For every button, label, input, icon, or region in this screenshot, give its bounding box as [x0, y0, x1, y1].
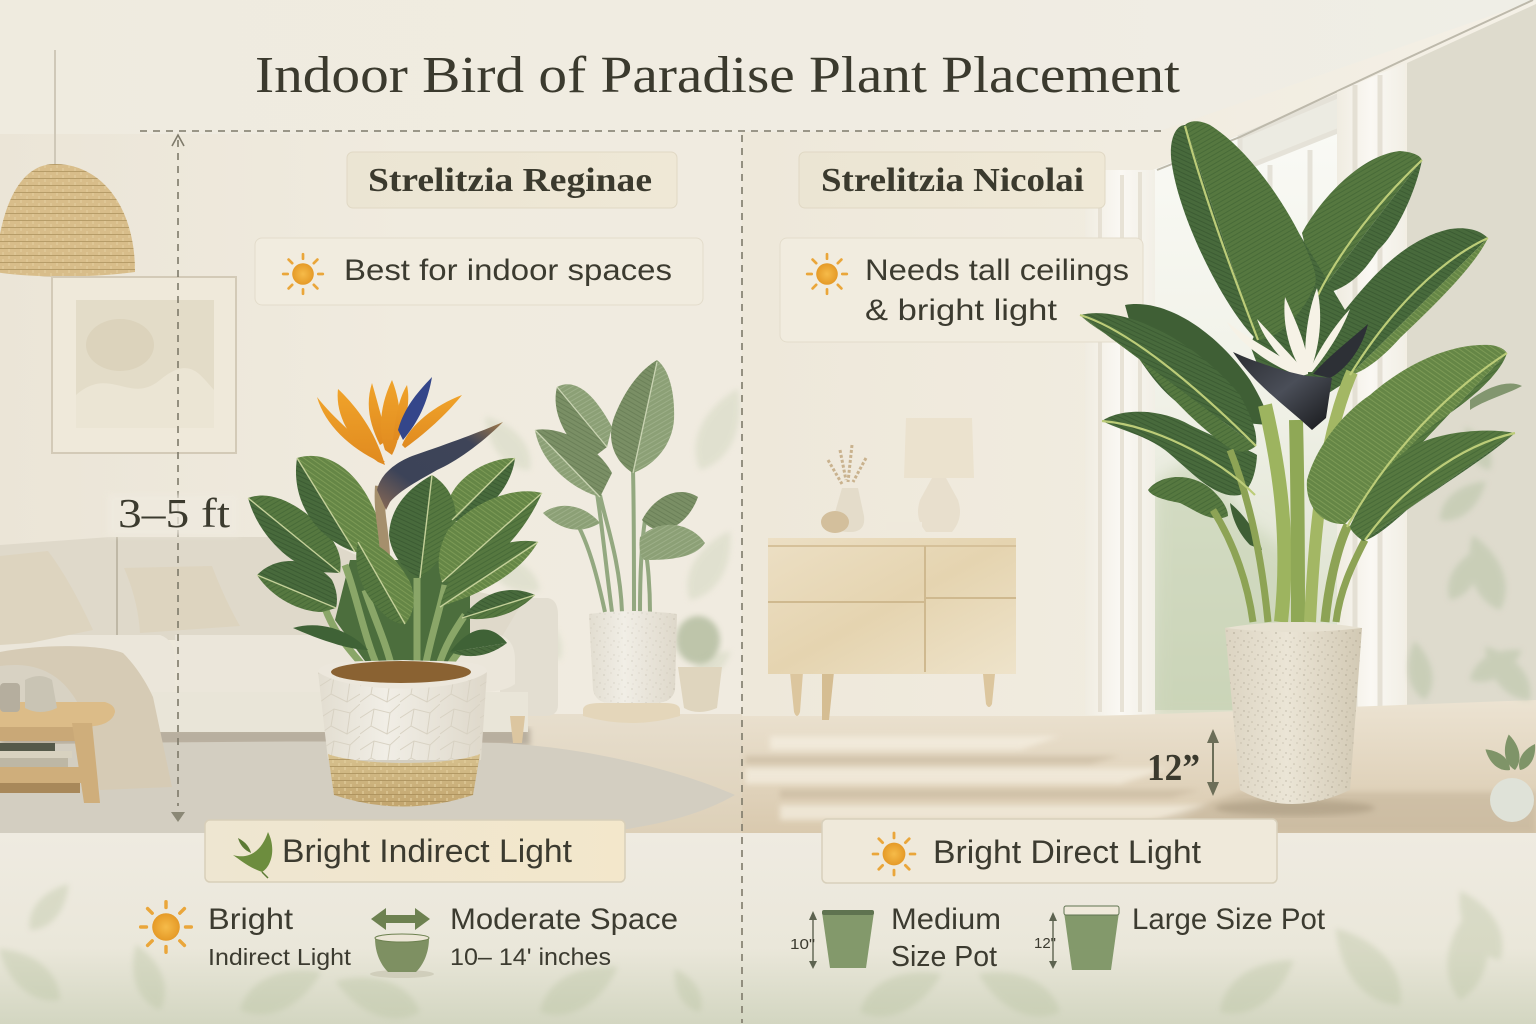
- white flower petals: [1227, 288, 1350, 376]
- front right leaves: [1307, 345, 1507, 524]
- feature: medium size pot: Size Pot: [891, 941, 997, 973]
- left column: species label: [347, 152, 677, 208]
- icon: medium pot with 10 inch measure: [790, 910, 874, 969]
- base: [0, 692, 528, 732]
- right banner: bright direct light: [822, 819, 1277, 883]
- vases and decor: [821, 445, 922, 533]
- top leaf: [1171, 125, 1257, 340]
- floor: [742, 700, 1536, 834]
- left column: callout best for indoor spaces: [255, 238, 703, 305]
- floor: [0, 714, 742, 834]
- bottom panel with foliage: [0, 833, 1536, 1024]
- stems: [325, 565, 475, 668]
- left plant pot: [318, 660, 487, 806]
- black flower beak: [1233, 324, 1368, 430]
- sofa shadow: [0, 728, 530, 746]
- saucer: [583, 703, 680, 723]
- wooden sideboard: [768, 538, 1016, 720]
- left column: species label: Strelitzia Reginae: [368, 162, 652, 199]
- right banner: bright direct light: Bright Direct Light: [933, 834, 1201, 870]
- left banner: bright indirect light: [205, 820, 625, 882]
- ghost foliage on wall: [473, 381, 754, 688]
- pot height label 12 inch: [1147, 729, 1219, 796]
- right column: species label: Strelitzia Nicolai: [821, 162, 1084, 199]
- lamp cord: [54, 50, 56, 170]
- shaded sofa under blanket: [0, 660, 85, 735]
- seat cushions: [0, 635, 175, 696]
- feature: moderate space: 10– 14' inches: [450, 944, 611, 971]
- feature: moderate space: [370, 903, 678, 978]
- height guide: dashed lines and arrows: [140, 131, 1165, 1023]
- cushions: [0, 551, 240, 645]
- small plant at bottom-right: [1481, 733, 1536, 822]
- sofa: [0, 537, 558, 743]
- blue petal: [398, 377, 432, 440]
- orange petals: [317, 380, 462, 465]
- woven pendant lamp: [0, 164, 135, 276]
- leaf backing behind flower: [1250, 235, 1352, 405]
- feature: bright indirect light: [141, 902, 352, 970]
- right wall: [742, 0, 1536, 716]
- feature: large size pot: [1034, 903, 1326, 970]
- feature: bright indirect light: Bright: [208, 903, 294, 936]
- throw blanket: [0, 646, 172, 790]
- plant: Strelitzia nicolai with flower: [1080, 121, 1522, 622]
- scene: right room: [742, 0, 1536, 834]
- scene: left living room: [0, 50, 754, 834]
- midribs: [1080, 126, 1515, 540]
- white curtains: [1085, 63, 1405, 715]
- icon: leaves: [233, 832, 272, 878]
- icon: large pot with 12 inch measure: [1034, 906, 1119, 970]
- pot height label 12 inch: 12”: [1147, 747, 1200, 789]
- feature: large size pot: Large Size Pot: [1132, 903, 1326, 936]
- height label 3-5 ft: 3–5 ft: [118, 490, 231, 536]
- far-right wall: [1407, 4, 1536, 716]
- right column: callout tall ceilings: Needs tall ceilings: [865, 254, 1129, 287]
- flower stem: [380, 486, 385, 555]
- feature: medium size pot: Medium: [891, 903, 1001, 936]
- feature: moderate space: Moderate Space: [450, 903, 678, 936]
- background plant: back corner palm: [535, 360, 722, 723]
- sunlight stripes on floor: [745, 736, 1210, 820]
- right column: species label: [799, 152, 1105, 208]
- side table with books and mugs: [0, 676, 115, 803]
- left column: callout best for indoor spaces: Best for indoor spaces: [344, 254, 672, 287]
- stems: [1213, 450, 1268, 622]
- flower beak: [377, 422, 503, 510]
- icon: medium pot with 10 inch measure: 10": [790, 936, 815, 953]
- plant: Strelitzia reginae with flower: [248, 377, 542, 668]
- right column: callout tall ceilings: & bright light: [865, 294, 1058, 327]
- stems: [570, 455, 650, 612]
- large speckled pot: [1215, 622, 1375, 816]
- left banner: bright indirect light: Bright Indirect Light: [282, 833, 572, 869]
- midribs: [248, 458, 542, 624]
- right column: callout tall ceilings: [780, 238, 1143, 342]
- icon: width arrow: [371, 908, 430, 930]
- dense foliage backing: [335, 560, 470, 668]
- icon: green bowl pot: [370, 934, 434, 978]
- icon: large pot with 12 inch measure: 12": [1034, 935, 1056, 952]
- rug: [0, 742, 735, 833]
- curtain rod: [1157, 0, 1533, 170]
- icon: sun: [141, 902, 191, 952]
- feature: medium size pot: [790, 903, 1001, 973]
- window with garden: [1153, 95, 1340, 720]
- back plant pot: [589, 611, 677, 703]
- left wall: [0, 134, 742, 716]
- back leaves: [1470, 384, 1522, 410]
- small plant in basket: [676, 616, 722, 712]
- feature: bright indirect light: Indirect Light: [208, 944, 352, 970]
- framed wall art: [52, 277, 236, 453]
- right-side ghost foliage: [1403, 422, 1536, 709]
- arm: [500, 598, 558, 716]
- title: Indoor Bird of Paradise Plant Placement: [255, 47, 1181, 104]
- table lamp: [904, 418, 974, 532]
